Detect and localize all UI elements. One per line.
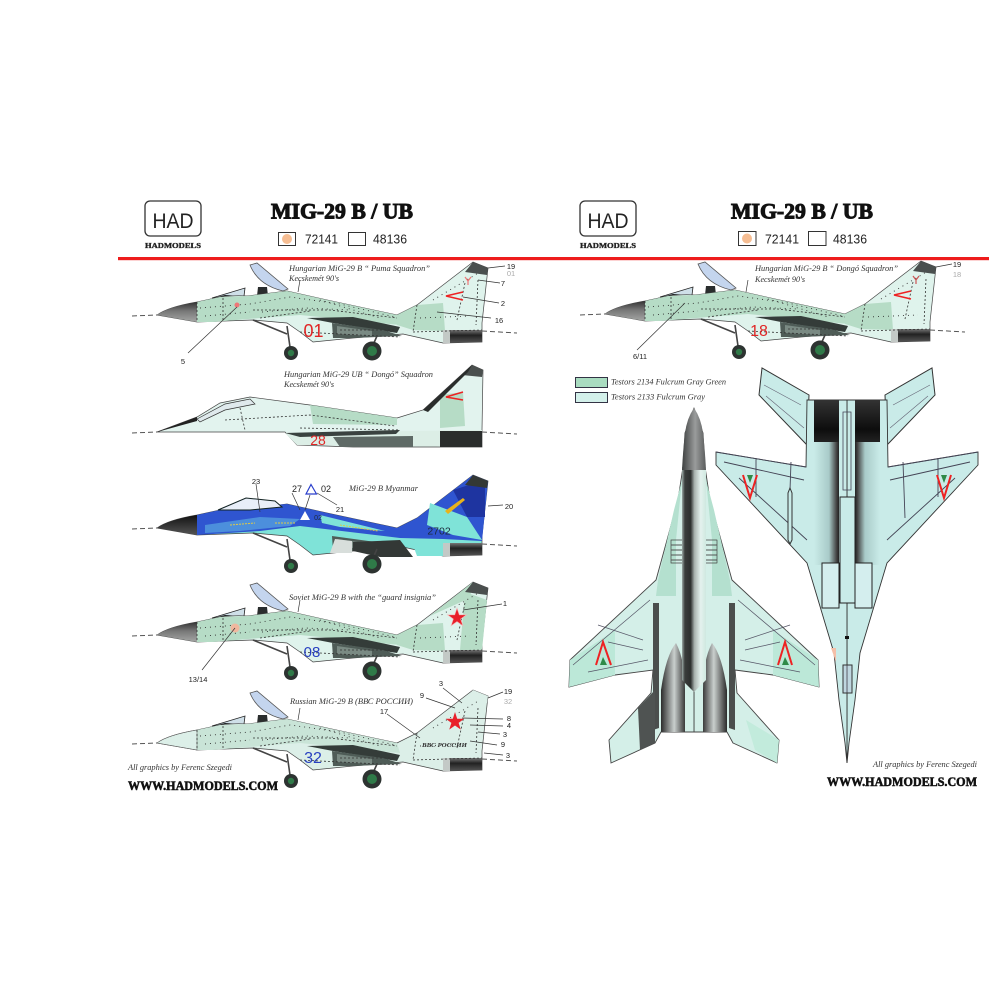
- side number 28: 28: [310, 432, 326, 448]
- jet: Russian MiG-29 B: [132, 690, 517, 788]
- legend: paint colours: Testors 2133 Fulcrum Gray: [611, 392, 705, 402]
- left footer credit: [127, 763, 278, 793]
- caption: Puma Squadron: Kecskemét 90's: [288, 274, 339, 283]
- white triangle marking: [300, 511, 310, 520]
- fin chevron: [446, 392, 463, 400]
- callouts: Myanmar: 02: [321, 484, 331, 494]
- fin number 2702: 2702: [427, 526, 451, 538]
- fuselage 02: 02: [314, 515, 322, 522]
- jet: Hungarian MiG-29 UB Dongo Squadron: [132, 365, 517, 448]
- scale selector 72141: 72141: [765, 232, 799, 246]
- closed canopy: [218, 498, 282, 510]
- wing roundel right: [778, 642, 792, 665]
- logo: HAD: HAD: [152, 210, 194, 233]
- caption: Dongo B: Kecskemét 90's: [754, 275, 805, 284]
- right footer credit: [827, 760, 977, 789]
- callouts: Puma Squadron: 2: [501, 299, 505, 308]
- callouts: Russian: 19: [504, 687, 512, 696]
- logo: HAD: HAD: [588, 210, 628, 233]
- left footer credit: All graphics by Ferenc Szegedi: [127, 763, 232, 772]
- callouts: Russian: 17: [380, 707, 388, 716]
- nose cone: [682, 408, 706, 470]
- caption: Dongo UB: [283, 370, 433, 389]
- callouts: Puma Squadron: 19: [507, 262, 515, 271]
- right footer credit: All graphics by Ferenc Szegedi: [872, 760, 977, 769]
- callouts: Russian: 3: [506, 751, 510, 760]
- callouts: Russian: 3: [439, 679, 443, 688]
- scale selector 48136: 48136: [373, 232, 407, 246]
- callouts: Puma Squadron: 5: [181, 357, 185, 366]
- centre keel: [840, 497, 855, 603]
- red divider line: [118, 257, 989, 260]
- callouts: Myanmar: 27: [292, 484, 302, 494]
- callouts: Puma Squadron: 16: [495, 316, 503, 325]
- callouts: Myanmar: 23: [252, 477, 260, 486]
- scale selector 48136: 48136: [833, 232, 867, 246]
- callouts: Puma Squadron: 01: [507, 269, 515, 278]
- caption: Puma Squadron: Hungarian MiG-29 B “ Puma Squadron”: [288, 264, 431, 273]
- callouts: Puma Squadron: [181, 262, 515, 366]
- red star: [446, 712, 464, 730]
- callouts: Dongo B: 19: [953, 260, 961, 269]
- pink panel: [831, 648, 836, 662]
- jet: Hungarian MiG-29 B Puma Squadron: [132, 262, 517, 360]
- jet: Hungarian MiG-29 B Dongo Squadron (right): [580, 261, 965, 360]
- title: MIG-29 B / UB: [271, 198, 413, 224]
- left header: [145, 198, 413, 250]
- side number 08: 08: [304, 644, 320, 661]
- callouts: Soviet: 1: [503, 599, 507, 608]
- caption: Dongo UB: Hungarian MiG-29 UB “ Dongó” Squadron: [283, 370, 433, 379]
- callouts: Russian: [298, 679, 512, 760]
- top view plan: [569, 408, 819, 763]
- legend: paint colours: Testors 2134 Fulcrum Gray Green: [611, 378, 726, 386]
- wing roundel left: [596, 642, 611, 665]
- scale selector 72141: [278, 232, 338, 246]
- spine: [682, 467, 706, 692]
- scale selector 72141: 72141: [305, 232, 338, 246]
- jet: Soviet MiG-29 B guard insignia: [132, 582, 517, 680]
- caption: Myanmar: MiG-29 B Myanmar: [348, 484, 419, 493]
- right footer credit: WWW.HADMODELS.COM: [827, 775, 977, 789]
- caption: Dongo B: [754, 264, 899, 284]
- legend: paint colours: [576, 378, 726, 402]
- side number 01: 01: [303, 321, 324, 341]
- logo: HAD: [145, 201, 201, 250]
- callouts: Russian: 8: [507, 714, 511, 723]
- callouts: Myanmar: 20: [505, 502, 513, 511]
- scale selector 48136: [348, 232, 407, 246]
- caption: Russian: Russian MiG-29 B (ВВС РОССИИ): [289, 697, 413, 706]
- right header: [580, 198, 873, 250]
- wing marking left: [743, 475, 757, 498]
- callouts: Myanmar: 21: [336, 505, 344, 514]
- scale selector 72141: [738, 232, 799, 246]
- fin camouflage: [427, 503, 482, 540]
- pink nose marking: [234, 302, 240, 308]
- callouts: Myanmar: [252, 477, 513, 514]
- caption: Puma Squadron: [288, 264, 431, 283]
- fin badge: [465, 277, 471, 285]
- side number 18: 18: [750, 323, 768, 340]
- fin badge: [913, 276, 919, 284]
- callouts: Russian: 4: [507, 721, 511, 730]
- left footer credit: WWW.HADMODELS.COM: [128, 779, 278, 793]
- caption: Dongo B: Hungarian MiG-29 B “ Dongó Squadron”: [754, 264, 899, 273]
- logo: HAD: HADMODELS: [145, 241, 201, 250]
- fin text: ВВС РОССИИ: [421, 742, 468, 749]
- jet: MiG-29 B Myanmar: [132, 475, 517, 574]
- red star: [448, 608, 466, 626]
- logo: HAD: [580, 201, 636, 250]
- callouts: Soviet: 13/14: [189, 675, 207, 684]
- logo: HAD: HADMODELS: [580, 241, 636, 250]
- fin chevron: [894, 291, 911, 299]
- callouts: Puma Squadron: 7: [501, 279, 505, 288]
- caption: Soviet: Soviet MiG-29 B with the “guard insignia”: [289, 593, 437, 602]
- fin chevron: [446, 292, 463, 300]
- wing marking right: [937, 475, 951, 498]
- missile: [788, 488, 792, 544]
- scale selector 48136: [808, 232, 867, 246]
- callouts: Dongo B: [633, 260, 961, 361]
- callouts: Dongo B: 18: [953, 270, 961, 279]
- callouts: Russian: 32: [504, 697, 512, 706]
- callouts: Soviet: [189, 599, 507, 684]
- side number 32: 32: [304, 750, 322, 767]
- bottom view plan: [716, 368, 978, 763]
- caption: Dongo UB: Kecskemét 90's: [283, 380, 334, 389]
- callouts: Russian: 3: [503, 730, 507, 739]
- callouts: Russian: 9: [420, 691, 424, 700]
- guard insignia: [230, 624, 240, 632]
- callouts: Russian: 9: [501, 740, 505, 749]
- title: MIG-29 B / UB: [731, 198, 873, 224]
- callouts: Dongo B: 6/11: [633, 352, 647, 361]
